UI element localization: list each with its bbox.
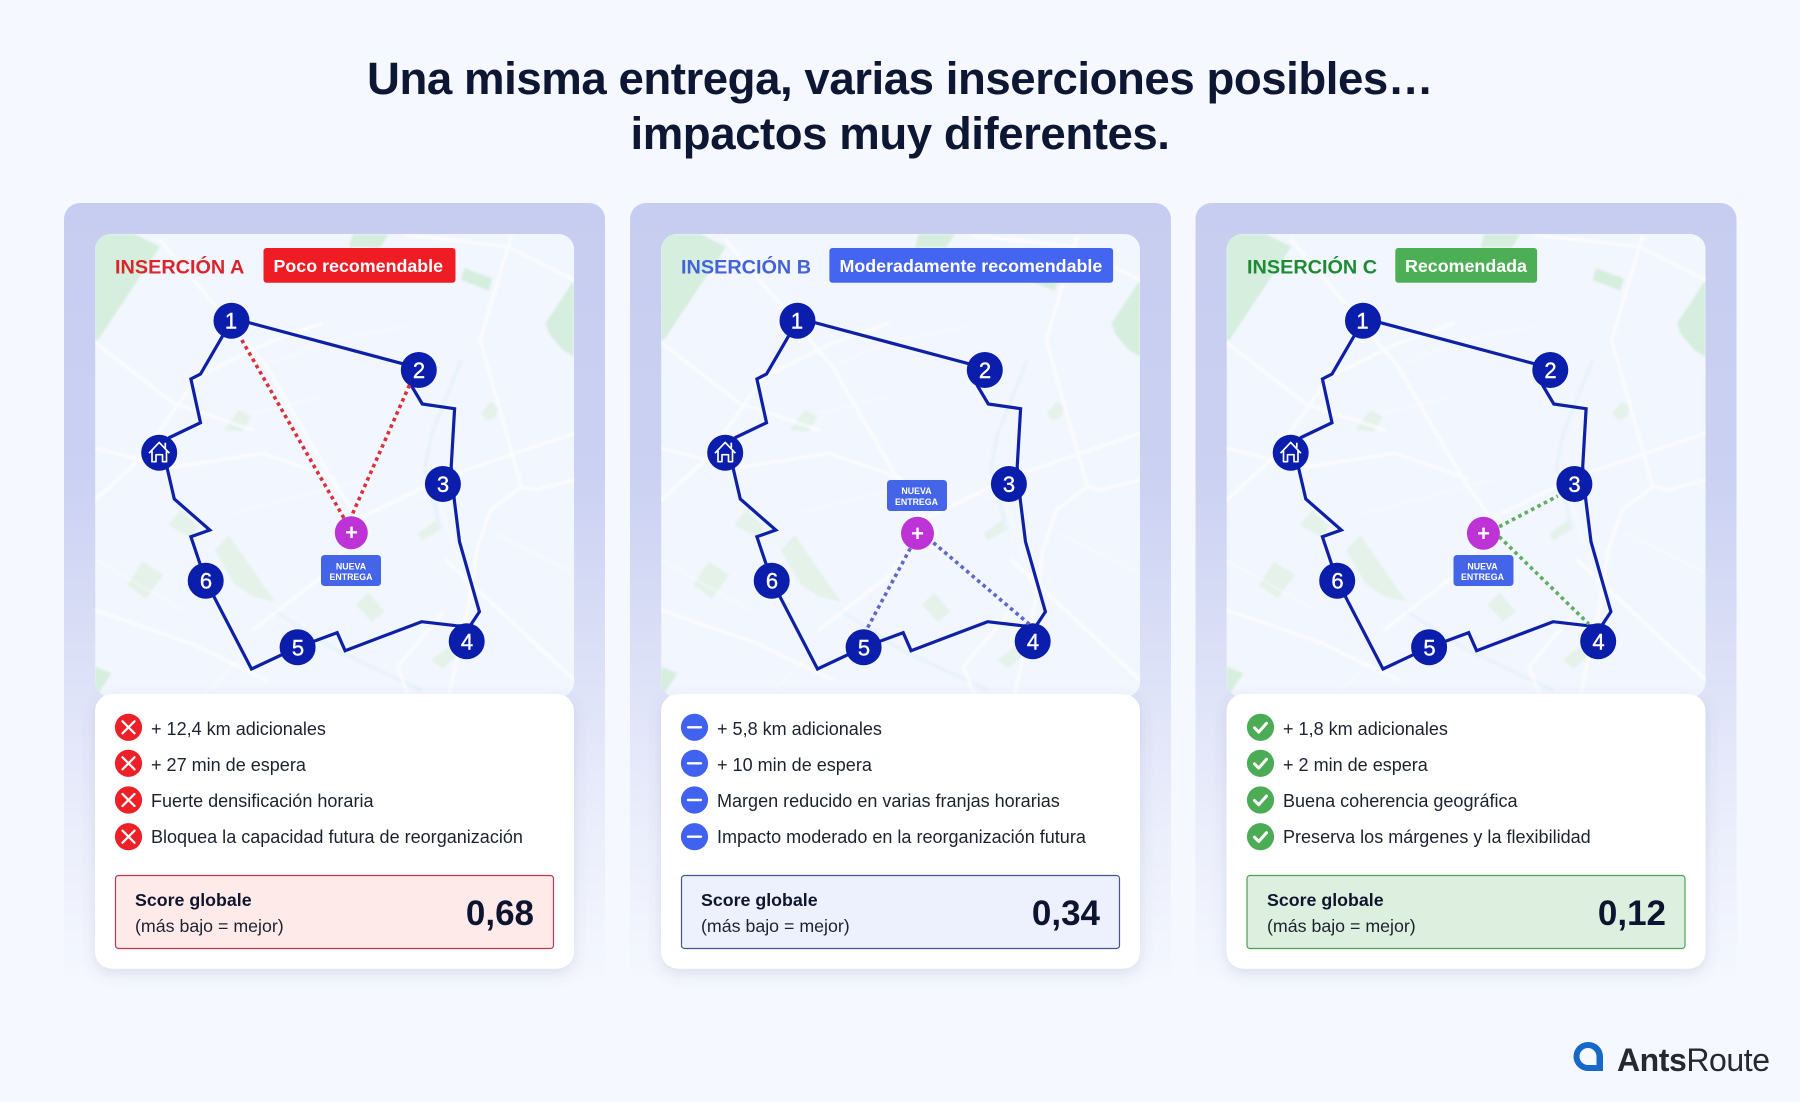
item A4 (115, 823, 523, 850)
item A2: + 27 min de espera (151, 755, 307, 775)
title: impactos muy diferentes. (630, 108, 1170, 159)
item B2 (681, 750, 873, 777)
icon: logo pin (1574, 1042, 1603, 1071)
map B (661, 234, 1140, 697)
new delivery label C: ENTREGA (1461, 572, 1505, 582)
score box B: 0,34 (1032, 894, 1101, 933)
new delivery marker B (901, 517, 934, 550)
item B3 (681, 786, 1060, 814)
score box A: 0,68 (466, 894, 534, 933)
item C2: + 2 min de espera (1283, 755, 1429, 775)
new delivery label A: NUEVA (336, 561, 367, 571)
item A4: Bloquea la capacidad futura de reorganización (151, 827, 523, 847)
score box C: (más bajo = mejor) (1267, 916, 1416, 936)
dotted insertion lines A (242, 340, 410, 518)
new delivery label B: ENTREGA (895, 497, 939, 507)
panel: insercion C (1196, 203, 1736, 988)
wordmark: AntsRoute (1617, 1042, 1770, 1078)
badge C: Recomendada (1405, 256, 1528, 276)
new delivery marker A (335, 516, 368, 549)
item C3 (1247, 786, 1519, 814)
score box C: Score globale (1267, 890, 1384, 910)
panel background C (1196, 203, 1736, 988)
route B (707, 303, 1051, 669)
new delivery marker A: + (345, 520, 358, 545)
item C1 (1247, 714, 1448, 741)
dotted insertion lines C (1499, 496, 1589, 624)
heading C: INSERCIÓN C (1247, 255, 1377, 279)
score box A: (más bajo = mejor) (135, 916, 284, 936)
item A3: Fuerte densificación horaria (151, 791, 374, 811)
score box A: Score globale (135, 890, 252, 910)
item B1 (681, 714, 882, 741)
badge A: Poco recomendable (274, 256, 443, 276)
new delivery label A: ENTREGA (329, 572, 373, 582)
score box A (116, 876, 554, 948)
heading B: INSERCIÓN B (681, 255, 811, 279)
badge C (1395, 248, 1537, 283)
new delivery marker C: + (1477, 521, 1490, 546)
new delivery label C: NUEVA (1467, 561, 1498, 571)
item C1: + 1,8 km adicionales (1283, 719, 1448, 739)
badge B: Moderadamente recomendable (840, 256, 1102, 276)
results card A (95, 694, 574, 969)
score box B (682, 876, 1120, 948)
route A (141, 303, 485, 669)
item A1 (115, 714, 326, 741)
map A (95, 234, 574, 697)
badge B (829, 248, 1113, 283)
title: Una misma entrega, varias inserciones posibles… (367, 53, 1433, 104)
panel: insercion B (630, 203, 1171, 988)
results card B (661, 694, 1140, 969)
results card C (1226, 694, 1706, 969)
item B3: Margen reducido en varias franjas horarias (717, 791, 1060, 811)
panel: insercion A (64, 203, 605, 988)
item B4: Impacto moderado en la reorganización futura (717, 827, 1087, 847)
panel background A (64, 203, 605, 988)
score box B: Score globale (701, 890, 818, 910)
route C (1273, 303, 1616, 669)
item B1: + 5,8 km adicionales (717, 719, 882, 739)
map C (1227, 234, 1706, 697)
item B4 (681, 823, 1087, 850)
item A3 (115, 786, 374, 814)
item A2 (115, 750, 307, 777)
item B2: + 10 min de espera (717, 755, 873, 775)
item C4 (1247, 823, 1591, 850)
new delivery label A (321, 555, 381, 586)
dotted insertion lines B (867, 543, 1029, 628)
item C2 (1247, 750, 1429, 777)
new delivery marker C (1467, 517, 1500, 550)
title (367, 53, 1433, 159)
item A1: + 12,4 km adicionales (151, 719, 326, 739)
new delivery label B (887, 480, 947, 511)
item C4: Preserva los márgenes y la flexibilidad (1283, 827, 1591, 847)
heading A: INSERCIÓN A (115, 255, 244, 279)
panel background B (630, 203, 1171, 988)
score box C (1247, 876, 1685, 948)
score box C: 0,12 (1598, 894, 1666, 933)
item C3: Buena coherencia geográfica (1283, 791, 1519, 811)
logo: AntsRoute (1574, 1042, 1770, 1078)
new delivery label B: NUEVA (901, 486, 932, 496)
badge A (264, 248, 456, 283)
score box B: (más bajo = mejor) (701, 916, 850, 936)
new delivery label C (1454, 555, 1514, 586)
new delivery marker B: + (911, 521, 924, 546)
